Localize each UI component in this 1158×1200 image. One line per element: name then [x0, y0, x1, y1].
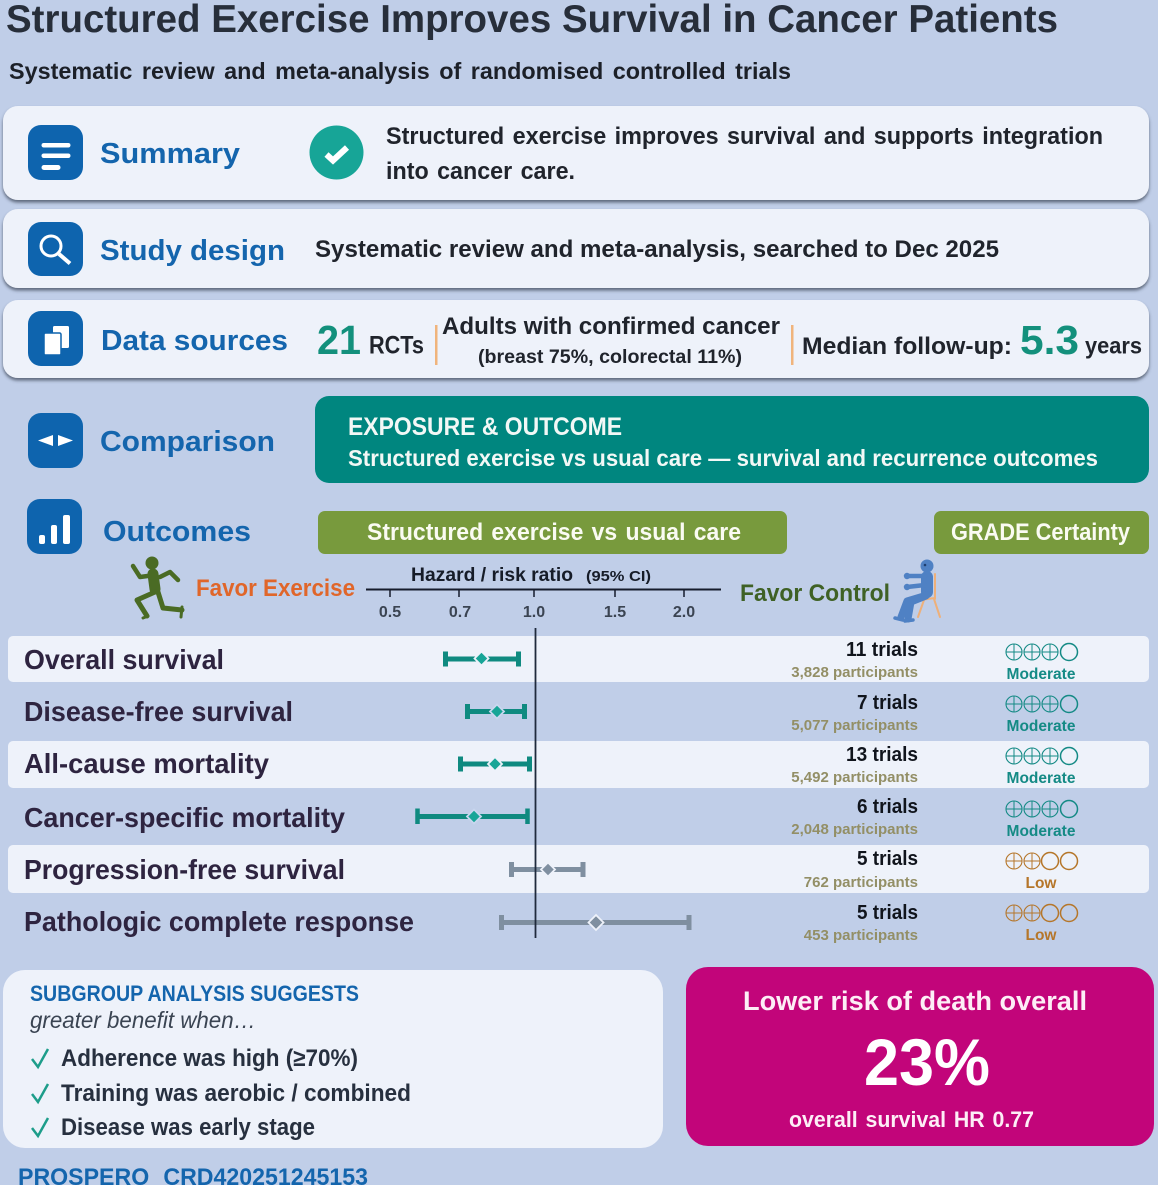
RCT count: 21	[317, 317, 361, 363]
row: pathologic complete response	[24, 902, 1078, 944]
icon: magnifier	[28, 222, 83, 276]
icon: check badge	[310, 126, 364, 180]
row: all-cause mortality	[24, 744, 1078, 787]
row: all-cause mortality: All-cause mortality	[24, 748, 269, 779]
median follow-up: 5.3	[1020, 317, 1079, 363]
callout: lower risk of death: Lower risk of death overall	[743, 986, 1087, 1016]
population	[442, 313, 780, 368]
summary heading: Summary	[100, 138, 240, 170]
panel: study design	[3, 209, 1149, 288]
axis: hazard / risk ratio: (95% CI)	[586, 568, 651, 585]
icon: outcomes bars	[27, 499, 82, 554]
row: pathologic complete response: Low	[1026, 927, 1057, 944]
panel: data sources	[3, 300, 1149, 378]
panel: exposure and outcome	[315, 396, 1149, 483]
population: Adults with confirmed cancer	[442, 313, 780, 340]
data sources heading: Data sources	[101, 325, 288, 357]
panel: subgroup analysis: greater benefit when…	[30, 1007, 256, 1033]
callout: lower risk of death	[686, 967, 1154, 1146]
axis: hazard / risk ratio: 0.5	[379, 604, 401, 621]
callout: lower risk of death: overall survival HR 0.77	[789, 1107, 1034, 1132]
summary text: into cancer care.	[386, 158, 575, 185]
axis: hazard / risk ratio: 0.7	[449, 604, 471, 621]
population: (breast 75%, colorectal 11%)	[478, 347, 742, 368]
row: all-cause mortality: 5,492 participants	[791, 769, 918, 786]
header: exercise vs usual care: Structured exercise vs usual care	[367, 519, 741, 546]
row: cancer-specific mortality: 6 trials	[857, 796, 918, 818]
panel: subgroup analysis: Adherence was high (≥70%)	[61, 1045, 358, 1072]
row: progression-free survival	[24, 848, 1078, 892]
icon: documents	[28, 311, 83, 366]
row: disease-free survival: 7 trials	[857, 692, 918, 714]
icon: summary lines	[28, 125, 83, 180]
row: all-cause mortality: 13 trials	[846, 744, 918, 766]
panel: subgroup analysis	[3, 970, 663, 1148]
registration number: PROSPERO CRD420251245153	[18, 1164, 368, 1191]
row bands	[8, 636, 1149, 893]
row: overall survival: Moderate	[1007, 666, 1076, 683]
RCT count	[317, 317, 424, 363]
panel: subgroup analysis: SUBGROUP ANALYSIS SUGGESTS	[30, 981, 359, 1006]
row: progression-free survival: Low	[1026, 875, 1057, 892]
study design text: Systematic review and meta-analysis, searched to Dec 2025	[315, 236, 999, 263]
panel: subgroup analysis: Disease was early stage	[61, 1114, 315, 1141]
row: progression-free survival: Progression-free survival	[24, 854, 345, 885]
median follow-up: Median follow-up:	[802, 333, 1012, 360]
favor control label: Favor Control	[740, 580, 890, 607]
axis: hazard / risk ratio: 2.0	[673, 604, 695, 621]
row: pathologic complete response: 5 trials	[857, 902, 918, 924]
header: GRADE certainty	[934, 511, 1149, 554]
icon: seated figure	[895, 560, 940, 621]
row: disease-free survival	[24, 692, 1078, 735]
callout: lower risk of death: 23%	[864, 1025, 990, 1099]
summary text	[386, 123, 1103, 185]
panel: subgroup analysis: Training was aerobic / combined	[61, 1080, 411, 1107]
row: overall survival: 3,828 participants	[791, 664, 918, 681]
row: cancer-specific mortality: Cancer-specific mortality	[24, 802, 345, 833]
study design heading: Study design	[100, 235, 285, 267]
icon: check marks	[32, 1049, 48, 1136]
comparison heading: Comparison	[100, 426, 275, 458]
header: exercise vs usual care	[318, 511, 787, 554]
axis: hazard / risk ratio: Hazard / risk ratio	[411, 565, 573, 586]
reference line at 1.0	[534, 628, 536, 938]
axis: hazard / risk ratio: 1.5	[604, 604, 626, 621]
row: disease-free survival: 5,077 participants	[791, 717, 918, 734]
row: overall survival: Overall survival	[24, 644, 224, 675]
median follow-up: years	[1085, 332, 1142, 358]
median follow-up	[802, 317, 1142, 363]
row: cancer-specific mortality: Moderate	[1007, 823, 1076, 840]
row: cancer-specific mortality	[24, 796, 1078, 840]
panel: exposure and outcome: Structured exercise vs usual care — survival and recurrence outcomes	[348, 445, 1098, 471]
RCT count: RCTs	[369, 332, 424, 360]
favor exercise label: Favor Exercise	[196, 575, 355, 602]
row: disease-free survival: Moderate	[1007, 718, 1076, 735]
panel: exposure and outcome: EXPOSURE & OUTCOME	[348, 413, 622, 441]
row: pathologic complete response: Pathologic complete response	[24, 906, 414, 937]
row: overall survival: 11 trials	[846, 639, 918, 661]
icon: comparison arrows	[28, 413, 83, 468]
subtitle: Systematic review and meta-analysis of randomised controlled trials	[9, 58, 791, 84]
panel: summary	[3, 106, 1149, 200]
outcomes heading: Outcomes	[103, 516, 251, 548]
icon: running figure	[133, 556, 182, 618]
axis: hazard / risk ratio	[366, 565, 721, 621]
row: disease-free survival: Disease-free survival	[24, 696, 293, 727]
row: all-cause mortality: Moderate	[1007, 770, 1076, 787]
header: GRADE certainty: GRADE Certainty	[951, 519, 1131, 546]
row: progression-free survival: 762 participants	[804, 874, 918, 891]
row: cancer-specific mortality: 2,048 participants	[791, 821, 918, 838]
row: overall survival	[24, 639, 1078, 683]
row: progression-free survival: 5 trials	[857, 848, 918, 870]
row: pathologic complete response: 453 participants	[804, 927, 918, 944]
summary text: Structured exercise improves survival and supports integration	[386, 123, 1103, 150]
axis: hazard / risk ratio: 1.0	[523, 604, 545, 621]
